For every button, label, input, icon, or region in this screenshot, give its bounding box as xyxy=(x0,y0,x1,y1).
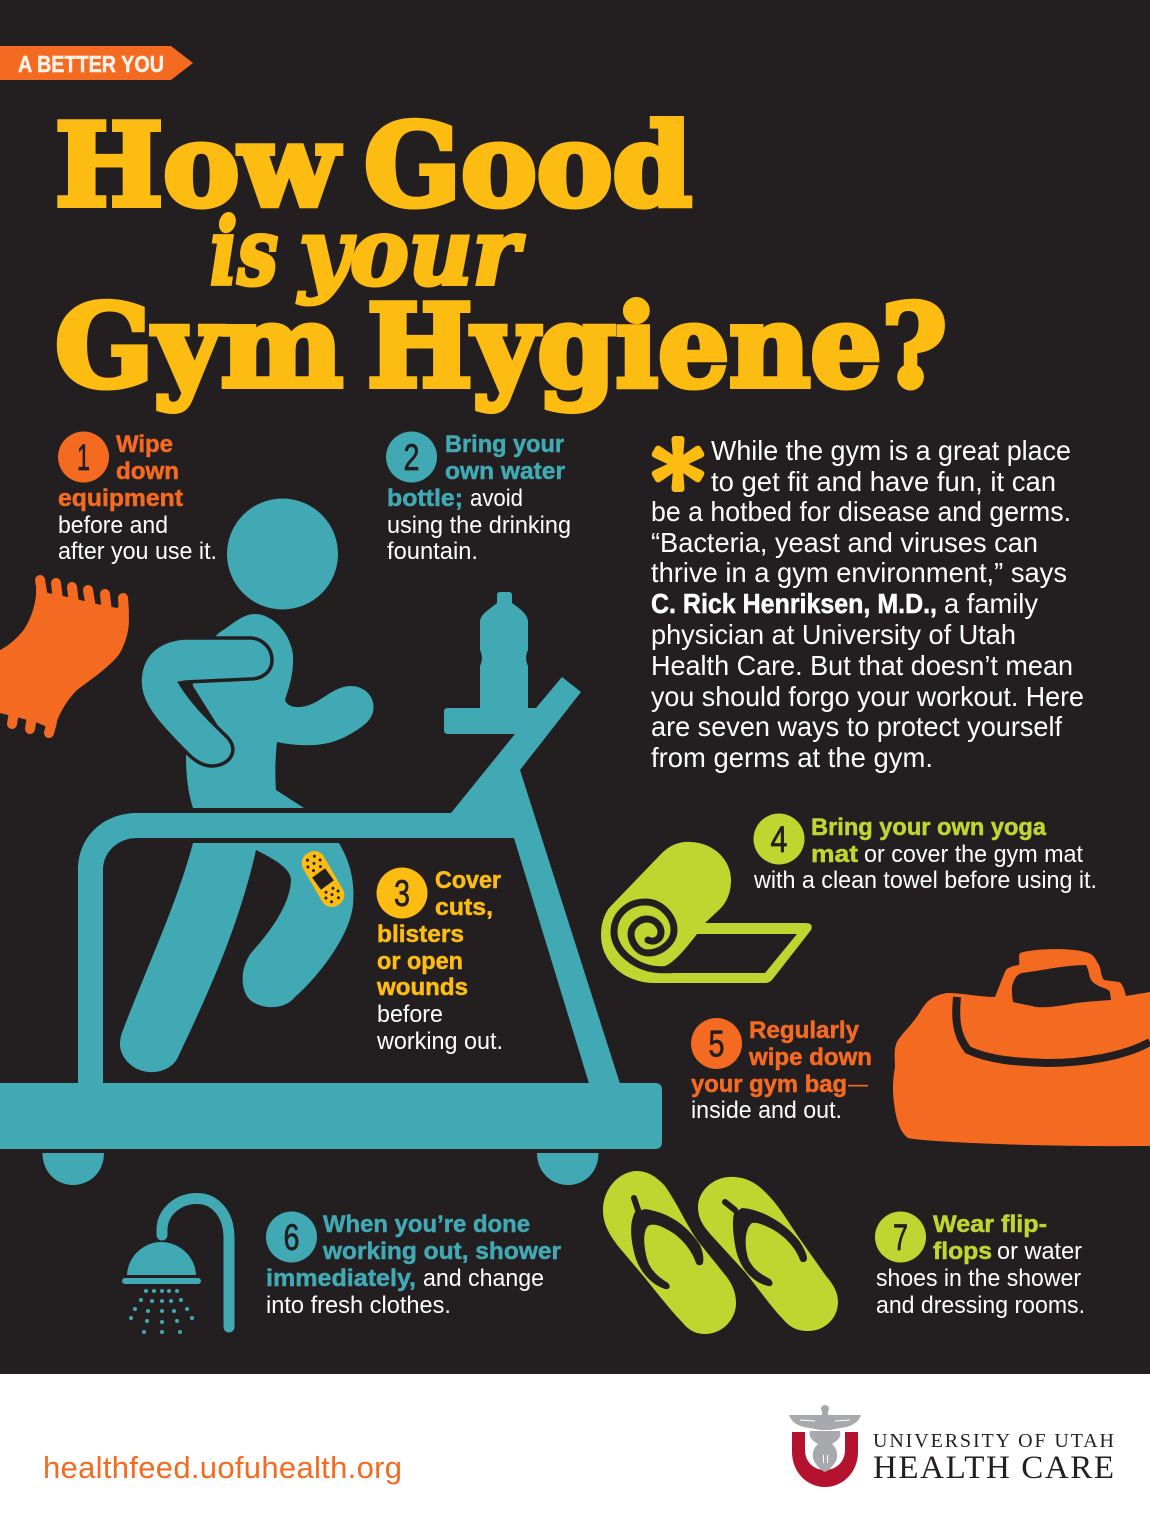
item 4: bring your own yoga mat: with a clean towel before using it. xyxy=(753,867,1097,894)
item 1: wipe down equipment: after you use it. xyxy=(58,538,217,565)
item 7: wear flip-flops: flops xyxy=(933,1238,992,1265)
item 6: shower immediately xyxy=(266,1211,561,1319)
item 7: wear flip-flops: 7 xyxy=(893,1217,908,1258)
item 2: bring your own water bottle: avoid xyxy=(470,485,523,512)
intro paragraph: be a hotbed for disease and germs. xyxy=(651,496,1071,527)
icon: towel xyxy=(0,580,129,733)
item 3: cover cuts: cuts, xyxy=(435,894,493,921)
runner legs xyxy=(120,843,353,1072)
item 6: shower immediately: into fresh clothes. xyxy=(266,1292,451,1319)
item 1: wipe down equipment: equipment xyxy=(58,485,183,512)
item 7: wear flip-flops: and dressing rooms. xyxy=(876,1292,1085,1319)
item 5: wipe down your gym bag xyxy=(691,1017,872,1124)
intro paragraph: While the gym is a great place xyxy=(711,435,1071,466)
intro paragraph: C. Rick Henriksen, M.D., xyxy=(651,588,937,619)
item 4: bring your own yoga mat: mat xyxy=(811,841,858,868)
icon: bandage xyxy=(298,847,348,911)
icon: yoga mat xyxy=(601,842,812,983)
item 7: wear flip-flops: or water xyxy=(997,1238,1082,1265)
treadmill frame xyxy=(78,677,622,1090)
title: is xyxy=(210,198,278,306)
intro paragraph: to get fit and have fun, it can xyxy=(711,466,1056,497)
red U xyxy=(792,1432,858,1487)
item 3: cover cuts: working out. xyxy=(376,1028,503,1055)
intro paragraph: a family xyxy=(944,588,1038,619)
item 2: bring your own water bottle: Bring your xyxy=(445,431,564,458)
logo text: UNIVERSITY OF UTAH xyxy=(873,1430,1114,1452)
right flip-flop xyxy=(698,1177,838,1331)
icon: flip-flops xyxy=(603,1171,838,1334)
item 3: cover cuts: blisters xyxy=(377,921,464,948)
treadmill wheels xyxy=(42,1153,598,1185)
item 2: bring your own water bottle: using the drinking xyxy=(387,512,571,539)
intro paragraph: from germs at the gym. xyxy=(651,742,933,773)
item 7: wear flip-flops: Wear flip- xyxy=(933,1211,1047,1238)
item 2: bring your own water bottle: fountain. xyxy=(387,538,478,565)
item 5: wipe down your gym bag: 5 xyxy=(708,1024,724,1064)
item 6: shower immediately: 6 xyxy=(284,1217,300,1258)
title: How xyxy=(55,99,341,232)
icon: runner head xyxy=(227,498,338,610)
title: Hygiene? xyxy=(367,280,947,413)
item 4: bring your own yoga mat xyxy=(753,814,1097,894)
icon: water bottle xyxy=(480,592,528,708)
intro paragraph: physician at University of Utah xyxy=(651,619,1016,650)
intro paragraph: you should forgo your workout. Here xyxy=(651,681,1084,712)
item 4: bring your own yoga mat: 4 xyxy=(770,819,788,860)
caduceus xyxy=(789,1405,861,1472)
intro paragraph xyxy=(651,435,1084,773)
item 5: wipe down your gym bag: wipe down xyxy=(748,1044,872,1071)
title: Gym xyxy=(55,280,343,413)
item 4: bring your own yoga mat: or cover the gym mat xyxy=(864,841,1083,868)
logo: university of utah health care: HEALTH CARE xyxy=(873,1450,1114,1486)
item 3: cover cuts: Cover xyxy=(435,867,501,894)
treadmill deck xyxy=(0,1083,662,1149)
item 3: cover cuts: wounds xyxy=(376,974,468,1001)
title xyxy=(55,99,947,413)
item 5: wipe down your gym bag: — xyxy=(848,1071,868,1098)
item 3: cover cuts xyxy=(376,867,503,1055)
logo: university of utah health care xyxy=(789,1405,1114,1487)
intro paragraph: thrive in a gym environment,” says xyxy=(651,557,1067,588)
item 3: cover cuts: or open xyxy=(377,948,463,975)
runner back arm xyxy=(140,638,272,766)
item 1: wipe down equipment: before and xyxy=(58,512,168,539)
item 1: wipe down equipment: down xyxy=(116,458,179,485)
item 6: shower immediately: immediately, xyxy=(266,1265,416,1292)
icon: asterisk xyxy=(651,436,705,492)
tag: a better you xyxy=(0,46,193,80)
footer url: healthfeed.uofuhealth.org xyxy=(43,1450,402,1485)
icon: shower xyxy=(125,1198,229,1334)
item 5: wipe down your gym bag: your gym bag xyxy=(691,1071,847,1098)
item 5: wipe down your gym bag: Regularly xyxy=(749,1017,860,1044)
item 1: wipe down equipment: Wipe xyxy=(116,431,173,458)
icon: gym bag xyxy=(893,949,1150,1146)
title: your xyxy=(297,198,525,306)
item 2: bring your own water bottle xyxy=(386,431,571,565)
intro paragraph: “Bacteria, yeast and viruses can xyxy=(651,527,1038,558)
item 2: bring your own water bottle: own water xyxy=(445,458,565,485)
footer band xyxy=(0,1374,1150,1518)
item 4: bring your own yoga mat: Bring your own yoga xyxy=(811,814,1047,841)
intro paragraph: are seven ways to protect yourself xyxy=(651,711,1062,742)
tag: a better you: A BETTER YOU xyxy=(18,51,164,77)
item 7: wear flip-flops xyxy=(875,1211,1085,1319)
title: Good xyxy=(364,99,692,232)
item 3: cover cuts: 3 xyxy=(394,873,410,914)
illustration: runner on treadmill xyxy=(0,498,662,1185)
item 6: shower immediately: When you’re done xyxy=(323,1211,530,1238)
intro paragraph: Health Care. But that doesn’t mean xyxy=(651,650,1073,681)
item 5: wipe down your gym bag: inside and out. xyxy=(691,1097,842,1124)
runner torso and front arm xyxy=(186,614,374,808)
item 1: wipe down equipment xyxy=(58,431,217,565)
left flip-flop xyxy=(603,1171,736,1334)
item 6: shower immediately: and change xyxy=(423,1265,544,1292)
item 3: cover cuts: before xyxy=(377,1001,443,1028)
item 7: wear flip-flops: shoes in the shower xyxy=(876,1265,1081,1292)
item 1: wipe down equipment: 1 xyxy=(77,437,90,478)
item 2: bring your own water bottle: 2 xyxy=(404,437,420,478)
item 6: shower immediately: working out, shower xyxy=(322,1238,561,1265)
item 2: bring your own water bottle: bottle; xyxy=(387,485,463,512)
